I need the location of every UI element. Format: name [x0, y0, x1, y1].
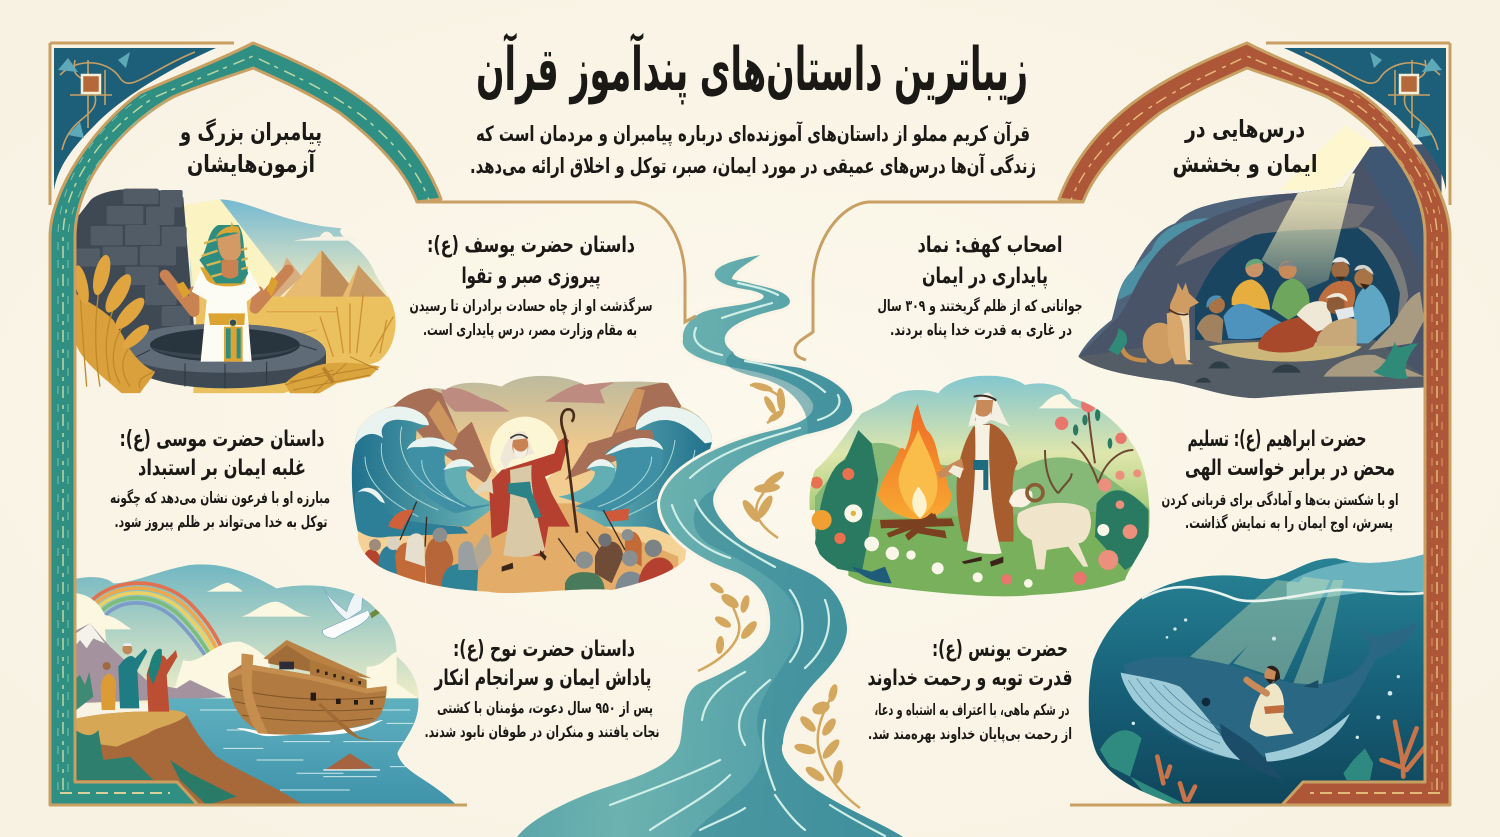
- stones and plants: [1108, 328, 1418, 387]
- text block: Jonah: حضرت یونس (ع):: [932, 637, 1068, 662]
- icon: gold sprig 1: [750, 381, 786, 424]
- foreground rocks: [1323, 292, 1424, 377]
- light rays: [1190, 577, 1343, 687]
- cave floor: [1078, 340, 1424, 398]
- sand: [355, 503, 678, 597]
- meadow: [848, 510, 1152, 600]
- illustration: Jonah and the whale: [1070, 550, 1460, 815]
- river: [517, 255, 903, 837]
- text block: Noah: [424, 637, 660, 741]
- ark: [228, 640, 387, 741]
- sky and pyramids: [184, 199, 390, 298]
- figure: Jonah: [1247, 666, 1293, 737]
- water surface line: [1142, 587, 1433, 601]
- cave rock: [1075, 140, 1455, 405]
- sunset sky and sun: [345, 370, 720, 595]
- text block: Joseph: پیروزی صبر و تقوا: [462, 264, 600, 289]
- crowd right: [558, 508, 673, 597]
- illustration: Noah's ark: [70, 560, 470, 805]
- left foliage: [811, 430, 892, 583]
- clouds: [70, 583, 418, 703]
- text block: Noah: داستان حضرت نوح (ع):: [453, 637, 635, 662]
- left panel heading: پیامبران بزرگ و: [179, 118, 322, 146]
- text block: Jonah: از رحمت بی‌پایان خداوند بهره‌مند شد.: [868, 725, 1072, 744]
- text block: Sleepers of the cave: در غاری به قدرت خدا پناه بردند.: [890, 321, 1072, 340]
- text block: Joseph: داستان حضرت یوسف (ع):: [427, 233, 635, 258]
- right waves: [558, 406, 712, 536]
- corner ornament: top left: [50, 43, 234, 205]
- text block: Abraham: پسرش، اوج ایمان را به نمایش گذاشت.: [1185, 513, 1393, 533]
- right panel heading: درس‌هایی در: [1184, 115, 1305, 143]
- text block: Jonah: قدرت توبه و رحمت خداوند: [868, 666, 1072, 691]
- cliff: [70, 710, 303, 805]
- illustration: Moses parting the sea: [345, 370, 720, 597]
- ram: [1009, 485, 1091, 569]
- river highlights: [610, 283, 885, 836]
- figure: Moses: [474, 409, 577, 572]
- sea: [168, 698, 455, 804]
- icon: gold sprig 3: [698, 581, 760, 671]
- people on the cliff: [101, 643, 177, 712]
- stone tower: [76, 188, 194, 340]
- text block: Moses: [110, 427, 330, 532]
- cave interior: [1195, 228, 1400, 343]
- desert and wheat field: [193, 297, 396, 393]
- teal arch band: [50, 43, 441, 805]
- text block: Noah: پاداش ایمان و سرانجام انکار: [434, 666, 652, 691]
- illustration: Joseph at the well: [70, 189, 396, 397]
- crowd left: [363, 502, 492, 597]
- wheat sheaf: [285, 357, 380, 397]
- sky: [76, 564, 418, 704]
- dog: [1120, 283, 1199, 364]
- right panel: arch frame: [1059, 43, 1450, 805]
- text block: Abraham: محض در برابر خواست الهی: [1185, 456, 1395, 481]
- illustration: Abraham and the fire: [805, 370, 1155, 600]
- text block: Jonah: در شکم ماهی، با اعتراف به اشتباه و دعا،: [874, 701, 1070, 719]
- text block: Sleepers of the cave: جوانانی که از ظلم گریختند و ۳۰۹ سال: [878, 296, 1082, 315]
- intro paragraph: قرآن کریم مملو از داستان‌های آموزنده‌ای درباره پیامبران و مردمان است که: [476, 121, 1030, 146]
- whale: [1121, 613, 1417, 780]
- left panel heading: آزمون‌هایشان: [187, 149, 316, 178]
- left panel: arch frame: [50, 43, 441, 805]
- darker river current: [690, 352, 903, 837]
- text block: Moses: توکل به خدا می‌تواند بر ظلم پیروز شود.: [114, 513, 328, 532]
- text block: Noah: نجات یافتند و منکران در طوفان نابود شدند.: [424, 723, 660, 741]
- figure: Abraham: [937, 393, 1018, 567]
- bubbles: [1132, 618, 1400, 739]
- text block: Sleepers of the cave: [878, 233, 1082, 340]
- rainbow: [91, 583, 224, 657]
- corner ornament: top right: [1266, 43, 1450, 205]
- decorative gold frame lines: [50, 202, 1450, 805]
- text block: Jonah: [868, 637, 1072, 744]
- campfire: [878, 403, 954, 541]
- text block: Moses: داستان حضرت موسی (ع):: [120, 427, 324, 452]
- text block: Sleepers of the cave: اصحاب کهف: نماد: [918, 233, 1062, 258]
- text block: Joseph: به مقام وزارت مصر، درس پایداری است.: [423, 321, 637, 340]
- figure: Joseph: [165, 222, 288, 362]
- right panel heading: [1172, 115, 1318, 178]
- text block: Moses: مبارزه او با فرعون نشان می‌دهد که چگونه: [110, 488, 330, 508]
- wheat stalks: [72, 253, 155, 393]
- corals: [1100, 722, 1425, 803]
- wave foam and rock: [237, 720, 383, 770]
- mountains: [70, 623, 227, 715]
- well back and rim: [125, 324, 326, 388]
- text block: Abraham: [1162, 427, 1398, 533]
- text block: Moses: غلبه ایمان بر استبداد: [138, 456, 306, 481]
- title: زیباترین داستان‌های پندآموز قرآن: [476, 32, 1028, 105]
- text block: Sleepers of the cave: پایداری در ایمان: [922, 264, 1048, 289]
- text block: Joseph: سرگذشت او از چاه حسادت برادران تا رسیدن: [410, 296, 652, 316]
- intro paragraph: زندگی آن‌ها درس‌های عمیقی در مورد ایمان، صبر، توکل و اخلاق ارائه می‌دهد.: [470, 153, 1036, 178]
- light beam: [1262, 173, 1355, 290]
- icon: gold sprig 2: [740, 469, 786, 538]
- dove: [322, 586, 380, 639]
- sky and hills: [805, 370, 1155, 537]
- water: [1070, 550, 1460, 815]
- text block: Noah: پس از ۹۵۰ سال دعوت، مؤمنان با کشتی: [437, 699, 653, 718]
- right panel heading: ایمان و بخشش: [1172, 150, 1318, 178]
- canyon walls: [393, 382, 682, 483]
- text block: Joseph: [410, 233, 652, 340]
- glow above the cave: [1280, 125, 1375, 190]
- left panel heading: [179, 118, 322, 178]
- flowering tree and shrubs: [864, 398, 1148, 588]
- terracotta arch band: [1059, 43, 1450, 805]
- left waves: [350, 407, 495, 538]
- illustration: cave of the sleepers: [1075, 125, 1455, 405]
- icon: gold sprig 4: [793, 683, 860, 808]
- sleepers and companions: [1197, 257, 1390, 353]
- text block: Abraham: حضرت ابراهیم (ع): تسلیم: [1188, 427, 1366, 452]
- intro paragraph: [470, 121, 1036, 178]
